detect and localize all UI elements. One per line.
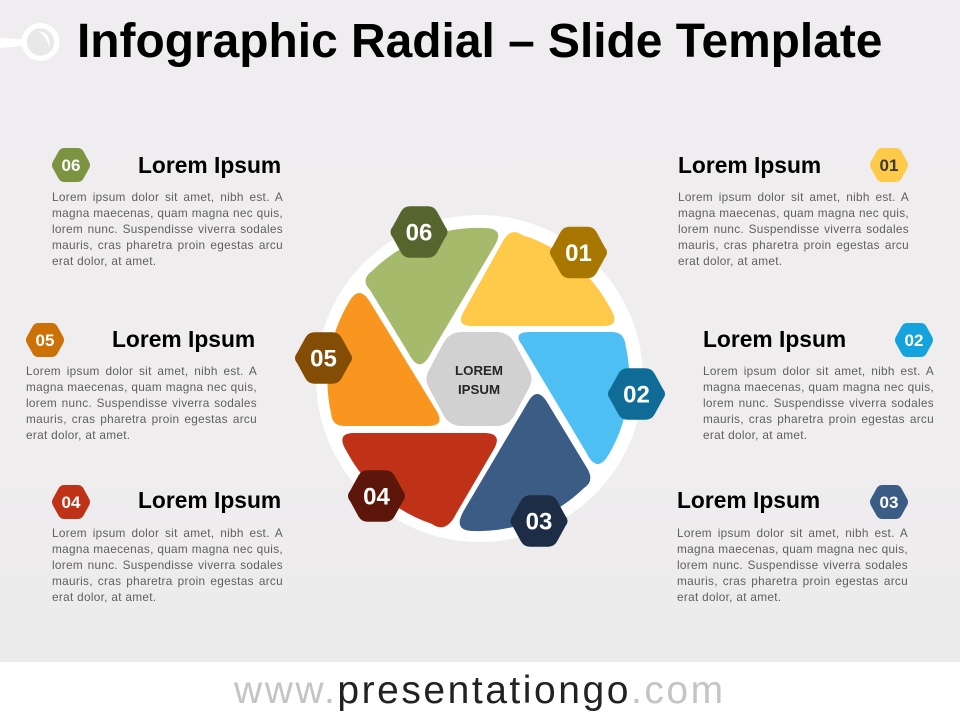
badge 01 — [550, 227, 607, 278]
panel: 06 top left — [52, 148, 283, 268]
segment 04 red — [342, 433, 497, 527]
icon: badge 03 — [870, 485, 908, 519]
badge 03 — [510, 495, 568, 547]
heading: Lorem Ipsum — [703, 326, 846, 352]
text block: mauris, cras pharetra proin egestas arcu — [26, 412, 257, 426]
icon: badge 06: 06 — [62, 156, 80, 175]
segment 06 green — [365, 228, 498, 364]
badge 04: 04 — [363, 484, 390, 510]
text block: magna maecenas, quam magna nec quis, — [678, 206, 909, 220]
text block: lorem nunc. Suspendisse viverra sodales — [52, 558, 283, 572]
heading: Lorem Ipsum — [678, 152, 821, 178]
text block: erat dolor, at amet. — [703, 428, 807, 442]
center hexagon: IPSUM — [458, 382, 500, 397]
text block: Lorem ipsum dolor sit amet, nibh est. A — [26, 364, 257, 378]
icon: badge 05 — [26, 323, 64, 357]
icon: badge 04 — [52, 485, 90, 519]
badge 05: 05 — [310, 346, 337, 372]
text block — [26, 364, 257, 442]
text block: Lorem ipsum dolor sit amet, nibh est. A — [703, 364, 934, 378]
center hexagon — [426, 332, 532, 426]
footer website: www.presentationgo.com — [234, 669, 726, 712]
text block — [52, 526, 283, 604]
text block: lorem nunc. Suspendisse viverra sodales — [703, 396, 934, 410]
text block: Lorem ipsum dolor sit amet, nibh est. A — [52, 526, 283, 540]
badge 06 — [390, 206, 448, 258]
icon: badge 01 — [870, 148, 908, 182]
heading: Lorem Ipsum — [138, 487, 281, 513]
panel: 01 top right — [678, 148, 909, 268]
text block — [677, 526, 908, 604]
icon: logo ring — [0, 23, 60, 61]
text block: mauris, cras pharetra proin egestas arcu — [703, 412, 934, 426]
badge 04 — [348, 470, 405, 522]
text block: erat dolor, at amet. — [52, 254, 156, 268]
panel: 03 bottom right — [677, 485, 908, 604]
panel: 05 middle left — [26, 323, 257, 442]
text block: lorem nunc. Suspendisse viverra sodales — [677, 558, 908, 572]
text block — [678, 190, 909, 268]
text block: magna maecenas, quam magna nec quis, — [703, 380, 934, 394]
text block: mauris, cras pharetra proin egestas arcu — [678, 238, 909, 252]
text block: magna maecenas, quam magna nec quis, — [26, 380, 257, 394]
text block: mauris, cras pharetra proin egestas arcu — [52, 574, 283, 588]
text block — [52, 190, 283, 268]
badge 02: 02 — [623, 382, 650, 408]
icon: badge 03: 03 — [880, 493, 898, 512]
panel: 04 bottom left — [52, 485, 283, 604]
text block: lorem nunc. Suspendisse viverra sodales — [52, 222, 283, 236]
heading: Lorem Ipsum — [677, 487, 820, 513]
segment 02 blue — [518, 332, 629, 464]
text block: lorem nunc. Suspendisse viverra sodales — [26, 396, 257, 410]
text block: Lorem ipsum dolor sit amet, nibh est. A — [677, 526, 908, 540]
heading: Lorem Ipsum — [138, 152, 281, 178]
center hexagon: LOREM — [455, 363, 503, 378]
panel: 02 middle right — [703, 323, 934, 442]
text block: mauris, cras pharetra proin egestas arcu — [677, 574, 908, 588]
text block: erat dolor, at amet. — [678, 254, 782, 268]
text block: magna maecenas, quam magna nec quis, — [52, 542, 283, 556]
segment 05 orange — [327, 293, 440, 426]
badge 03: 03 — [526, 508, 552, 536]
badge 06: 06 — [406, 220, 432, 246]
white backing circle — [316, 215, 643, 542]
icon: badge 05: 05 — [36, 331, 54, 350]
badge 05 — [295, 332, 352, 384]
badge 01: 01 — [565, 240, 592, 267]
text block: erat dolor, at amet. — [26, 428, 130, 442]
text block: lorem nunc. Suspendisse viverra sodales — [678, 222, 909, 236]
segment 03 navy — [460, 394, 590, 531]
text block: mauris, cras pharetra proin egestas arcu — [52, 238, 283, 252]
heading: Lorem Ipsum — [112, 326, 255, 352]
icon: badge 01: 01 — [880, 156, 898, 175]
text block: Lorem ipsum dolor sit amet, nibh est. A — [52, 190, 283, 204]
title: Infographic Radial – Slide Template — [77, 15, 882, 68]
text block — [703, 364, 934, 442]
icon: badge 04: 04 — [62, 493, 81, 512]
icon: badge 02 — [895, 323, 933, 357]
text block: Lorem ipsum dolor sit amet, nibh est. A — [678, 190, 909, 204]
badge 02 — [608, 368, 665, 420]
text block: magna maecenas, quam magna nec quis, — [677, 542, 908, 556]
segment 01 yellow — [461, 232, 614, 326]
icon: badge 02: 02 — [905, 331, 923, 350]
text block: erat dolor, at amet. — [52, 590, 156, 604]
icon: badge 06 — [52, 148, 90, 182]
text block: magna maecenas, quam magna nec quis, — [52, 206, 283, 220]
text block: erat dolor, at amet. — [677, 590, 781, 604]
